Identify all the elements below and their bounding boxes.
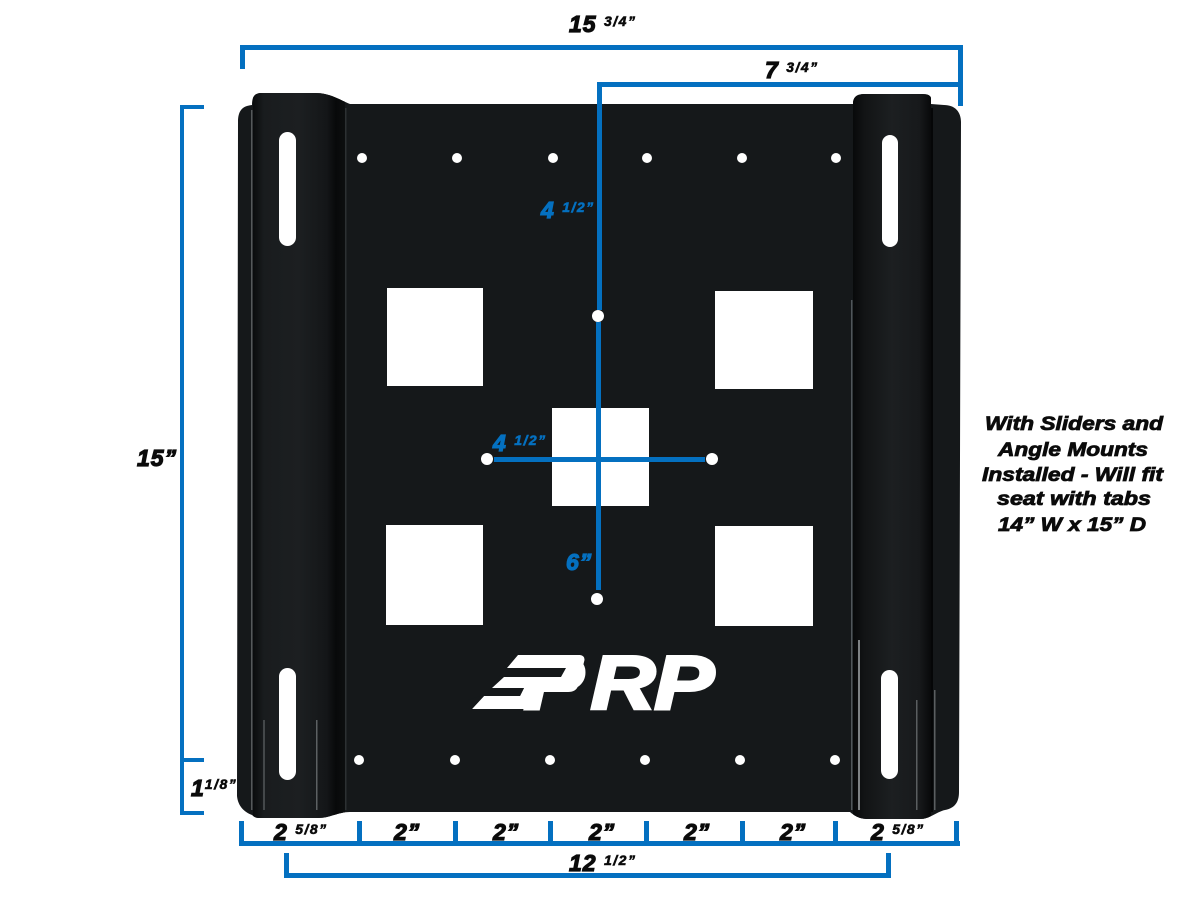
label: 15: 15” xyxy=(137,445,177,471)
label: 15 3/4: 15 xyxy=(569,11,597,37)
bottom spacing labels: 2” xyxy=(393,819,420,845)
label: 12 1/2: 12 xyxy=(569,850,597,876)
PRP logo: PRP xyxy=(524,640,715,725)
label: 15 3/4: 3/4” xyxy=(604,13,636,29)
fitment note: 14” W x 15” D xyxy=(998,515,1146,536)
label: horizontal 4 1/2: 4 xyxy=(493,430,507,456)
bottom spacing labels: 2” xyxy=(683,819,710,845)
fitment note: seat with tabs xyxy=(997,489,1151,510)
plate body xyxy=(237,93,961,819)
centre hole spacing lines xyxy=(494,322,705,590)
left mounting rail xyxy=(251,90,346,820)
bottom spacing labels: 2 xyxy=(274,819,288,845)
centre mounting holes xyxy=(481,310,718,605)
square cutouts xyxy=(386,288,813,626)
rail slots xyxy=(279,132,898,780)
seat mount plate xyxy=(237,90,961,820)
fitment note xyxy=(982,414,1164,536)
bottom spacing labels: 5/8” xyxy=(295,821,328,837)
label: 7 3/4: 3/4” xyxy=(786,59,819,75)
label: 1 1/8: 1 xyxy=(191,775,205,801)
bottom spacing labels: 2” xyxy=(779,819,806,845)
bottom spacing labels: 2” xyxy=(588,819,615,845)
top row of holes xyxy=(357,153,841,163)
label: horizontal 4 1/2: 1/2” xyxy=(514,432,547,448)
fitment note: Installed - Will fit xyxy=(982,465,1164,486)
bottom spacing labels: 2” xyxy=(492,819,519,845)
bottom spacing labels: 5/8” xyxy=(892,821,925,837)
label: 12 1/2: 1/2” xyxy=(604,852,636,868)
bracket 12 1/2 xyxy=(284,853,891,878)
label: 7 3/4: 7 xyxy=(765,57,779,83)
bottom spacing labels: 2 xyxy=(871,819,885,845)
overall depth bracket 15 xyxy=(180,105,204,815)
bottom spacing labels xyxy=(273,819,925,845)
right mounting rail xyxy=(851,90,936,820)
overall width bracket 15 3/4 xyxy=(240,45,963,106)
label: 6: 6” xyxy=(566,549,592,575)
fitment note: With Sliders and xyxy=(985,414,1163,435)
label: 1 1/8: 1/8” xyxy=(205,776,237,792)
bottom spacing bracket xyxy=(239,821,960,846)
fitment note: Angle Mounts xyxy=(997,440,1148,461)
label: vertical 4 1/2: 1/2” xyxy=(562,199,595,215)
bracket 7 3/4 xyxy=(597,82,963,310)
label: vertical 4 1/2: 4 xyxy=(541,197,555,223)
bottom row of holes xyxy=(354,755,840,765)
